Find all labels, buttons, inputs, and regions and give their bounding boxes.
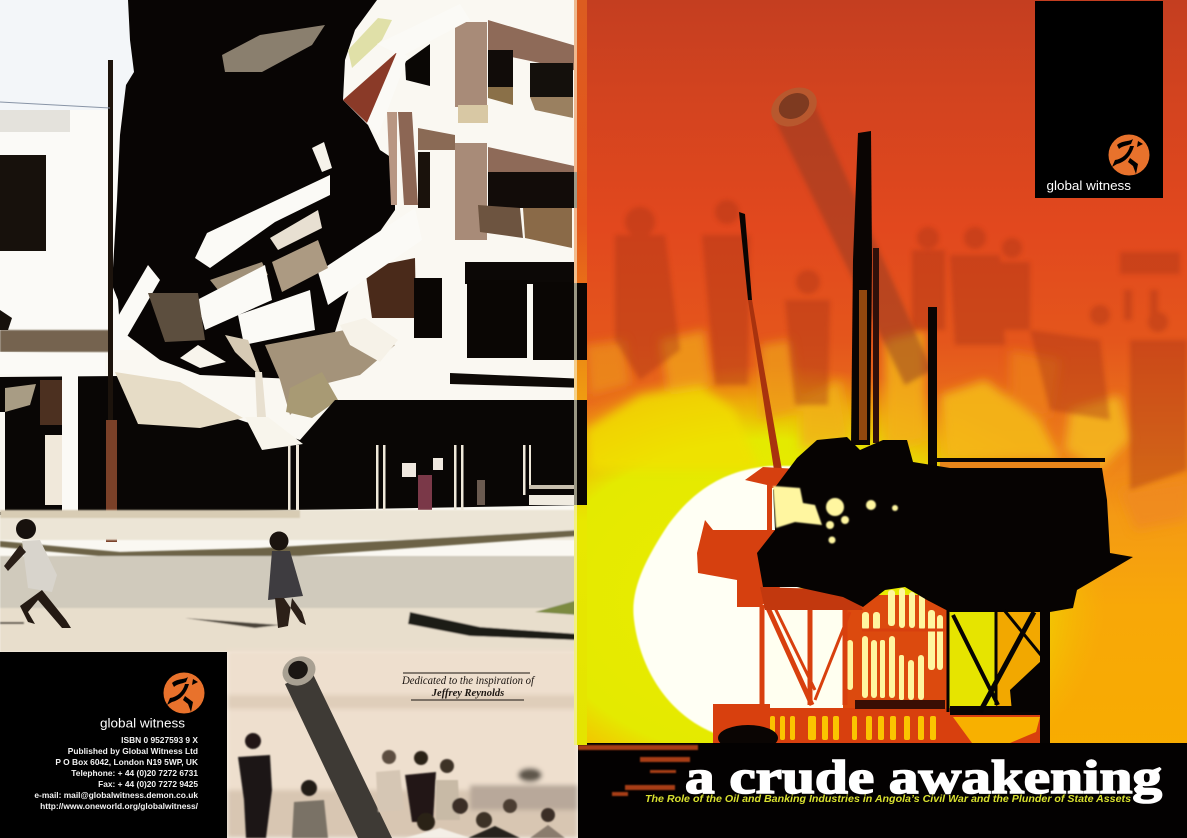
panel: oil rig at sunset [578, 0, 1187, 798]
ground-floor arcade [0, 372, 587, 515]
overlay: crowd, yellow and orange patches [585, 330, 1187, 530]
gun photo background [227, 650, 578, 838]
rubble slabs [119, 175, 398, 418]
publisher text: Fax: + 44 (0)20 7272 9425 [98, 779, 198, 789]
subtitle: The Role of the Oil and Banking Industries in Angola’s Civil War and the Plunder of State Assets [645, 794, 1131, 805]
orange-lit rig legs [762, 605, 945, 712]
orange-lit deck edge [697, 520, 780, 607]
publisher text [34, 735, 199, 811]
tank gun barrel [278, 651, 392, 838]
panel: publisher details [0, 652, 227, 838]
first-floor slab [0, 352, 105, 354]
lit windows in deck [773, 486, 898, 544]
dedication: Dedicated to the inspiration of [401, 675, 536, 687]
debris in black mass [222, 4, 470, 172]
utility pole [0, 60, 117, 542]
dark truss [948, 608, 1045, 745]
oil rig silhouette [697, 131, 1133, 745]
brand name: global witness [100, 716, 186, 730]
sea [578, 743, 1187, 838]
sky [0, 0, 140, 110]
lattice slots [847, 588, 943, 700]
flare post [928, 307, 937, 467]
dedication [401, 673, 536, 700]
publisher text: ISBN 0 9527593 9 X [121, 735, 198, 745]
dedication: Jeffrey Reynolds [431, 688, 504, 699]
children by the gun [238, 733, 565, 838]
yellow seam between photographs [574, 0, 587, 745]
lower deck [713, 700, 1050, 751]
panel: top-right logo block [1035, 1, 1163, 198]
lime sun glow [587, 370, 1084, 743]
sun reflection on sea [578, 745, 698, 796]
brand name: global witness [1046, 178, 1132, 193]
icon: global witness logo [1108, 134, 1150, 176]
right building detail [365, 20, 587, 388]
publisher text: P O Box 6042, London N19 5WP, UK [55, 757, 198, 767]
icon: global witness logo [164, 672, 204, 714]
running child, centre [268, 532, 306, 628]
overlay: gun shadow [764, 80, 932, 385]
sun [633, 466, 800, 737]
derrick [851, 131, 879, 445]
black collapsed interior [112, 0, 395, 380]
running child, left [4, 519, 71, 628]
overlay: crowd, dark figures [615, 200, 1187, 490]
publisher text: http://www.oneworld.org/globalwitness/ [40, 801, 199, 811]
publisher text: Published by Global Witness Ltd [68, 746, 198, 756]
crane arm [739, 212, 782, 470]
publisher text: e-mail: mail@globalwitness.demon.co.uk [34, 790, 198, 800]
upper right deck rail [935, 458, 1105, 462]
pavement and road [0, 510, 580, 652]
title: a crude awakening [685, 751, 1162, 804]
left damaged building [0, 110, 108, 353]
main deck mass [757, 437, 1133, 612]
publisher text: Telephone: + 44 (0)20 7272 6731 [71, 768, 198, 778]
glow behind rig legs [799, 595, 1040, 708]
panel: war-damaged building photograph [0, 0, 587, 838]
